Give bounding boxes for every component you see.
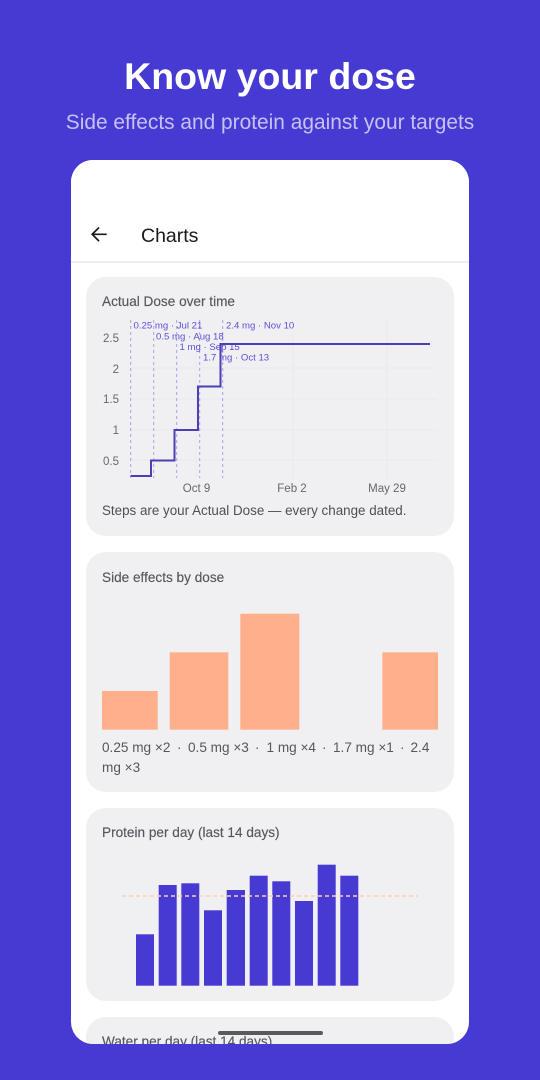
target line <box>122 895 418 897</box>
y axis labels: 0.5 <box>103 456 119 468</box>
dose change labels: 0.25 mg · Jul 21 <box>134 320 202 332</box>
y axis labels <box>103 333 119 468</box>
dose legend: 2.4 <box>410 740 429 755</box>
y axis labels: 2 <box>113 364 119 376</box>
screen heading: Charts <box>141 225 198 247</box>
title: Know your dose <box>124 55 416 97</box>
dose legend: 0.25 mg ×2 <box>102 740 170 755</box>
x axis labels: Feb 2 <box>277 483 307 495</box>
x axis labels: May 29 <box>368 483 406 495</box>
panel heading: Side effects by dose <box>102 570 224 585</box>
dose change labels <box>134 320 294 363</box>
bar chart <box>122 864 418 986</box>
dose change labels: 1 mg · Sep 15 <box>180 342 240 353</box>
y axis labels: 2.5 <box>103 333 119 345</box>
chart caption: Steps are your Actual Dose — every change dated. <box>102 503 406 518</box>
dose legend: · <box>322 740 327 755</box>
dose legend: · <box>177 740 182 755</box>
subtitle: Side effects and protein against your targets <box>66 111 474 134</box>
panel: actual dose over time <box>86 277 454 536</box>
dose legend: 0.5 mg ×3 <box>188 740 249 755</box>
phone screen <box>71 160 469 1044</box>
y axis labels: 1.5 <box>103 394 119 406</box>
app bar <box>71 160 469 263</box>
dose legend: · <box>255 740 260 755</box>
panel: side effects by dose <box>86 552 454 792</box>
panel: protein per day <box>86 808 454 1001</box>
step chart <box>103 320 430 495</box>
home indicator <box>218 1031 323 1034</box>
panel heading: Protein per day (last 14 days) <box>102 825 280 840</box>
dose legend: 1.7 mg ×1 <box>333 740 394 755</box>
dose legend: · <box>400 740 405 755</box>
dose legend <box>102 740 430 775</box>
x axis labels <box>183 483 406 495</box>
dose step line <box>130 344 430 476</box>
dose change labels: 2.4 mg · Nov 10 <box>226 320 294 332</box>
dose legend: mg ×3 <box>102 760 140 775</box>
x axis labels: Oct 9 <box>183 483 210 495</box>
dose change labels: 0.5 mg · Aug 18 <box>156 331 224 342</box>
dose legend: 1 mg ×4 <box>266 740 316 755</box>
dose change labels: 1.7 mg · Oct 13 <box>203 352 269 363</box>
y axis labels: 1 <box>113 425 119 437</box>
bar chart <box>102 614 438 730</box>
panel: water per day <box>86 1017 454 1044</box>
icon: back arrow <box>91 226 107 242</box>
panel heading: Actual Dose over time <box>102 294 235 309</box>
